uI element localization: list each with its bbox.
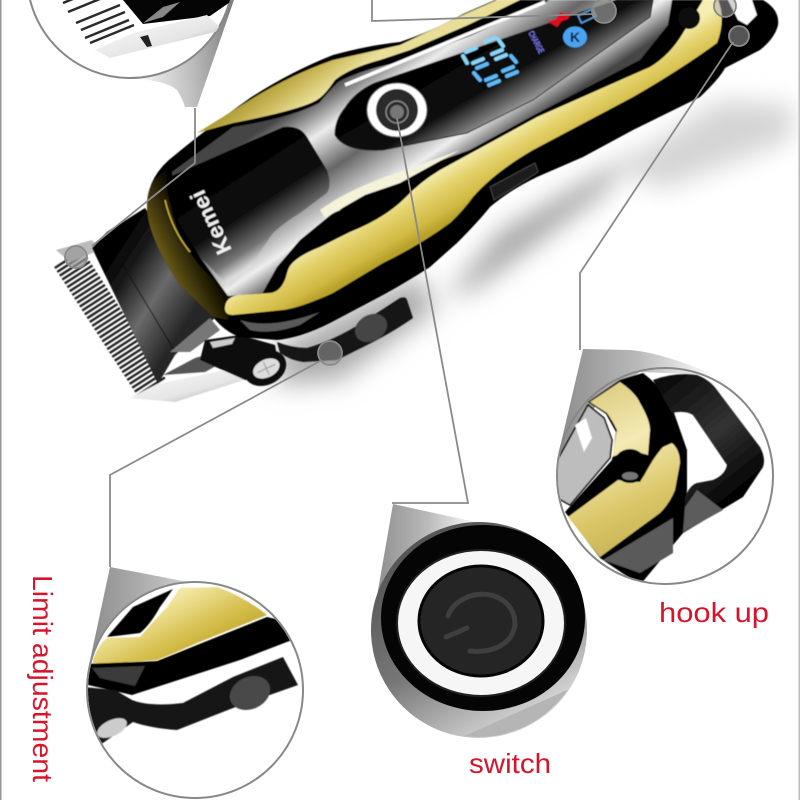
lever [84,657,298,745]
ring: hook [729,26,749,46]
power button [367,83,427,137]
chrome [552,405,612,505]
lens tail [557,349,715,460]
black wedge below deck [262,171,436,294]
chrome bar [95,15,223,58]
thumb pad [229,676,271,711]
label: Limit adjustment: Limit adjustment [27,575,58,782]
line to limit lens [110,360,322,567]
label: switch: switch [469,748,551,779]
ring: blade corner [65,246,87,268]
wheel [96,717,128,739]
top lens tail [120,0,234,107]
brand: Kemei [185,186,237,258]
hook opening [728,0,757,25]
lower gold band [225,0,722,315]
line to switch lens [392,118,468,503]
button face [419,566,543,676]
black corner [107,589,173,637]
lower bevel [465,690,568,737]
black underside [84,617,292,695]
teeth [63,0,134,43]
line to hook lens [580,42,733,350]
gold upper [590,382,650,457]
switch lens [371,504,590,745]
gold lower [568,443,680,557]
lens tail [372,504,480,625]
underside reflection [240,312,320,332]
black blade [123,0,233,24]
chrome stripes [345,2,545,85]
blade guards [130,318,280,402]
icon: logo circle [563,26,587,48]
head rim [147,170,230,320]
limit lever [277,297,413,362]
hook lens [552,349,773,585]
icon: power [446,594,515,651]
blade block [92,208,218,384]
grey plate [143,2,180,23]
hook arm [653,374,764,533]
line to top lens [92,108,195,246]
status label: CHARGE [526,29,546,55]
cast shadow under clipper [275,100,795,385]
gold body [93,587,267,665]
screw [613,449,647,483]
ring: limit lever [318,341,342,365]
top gold strip [197,0,520,133]
chrome deck [172,0,672,296]
line to display [372,0,595,21]
triangle [683,490,723,532]
ring: display icon [592,0,616,23]
top detail lens [27,0,233,78]
display panel [335,0,653,150]
black frame [565,373,687,585]
callout lines and target rings [65,0,749,567]
bottom grey [603,518,673,573]
body silhouette [147,0,778,340]
underside reflection [92,666,145,686]
icon: battery [578,9,596,23]
black bezel [381,525,585,711]
pale highlight band [320,150,460,218]
icon: logo circle: K [570,29,580,45]
clipper [56,0,778,402]
icon: red plug [547,12,572,27]
side button [490,163,538,200]
limit adjustment lens [84,567,303,798]
label: hook up: hook up [659,597,769,628]
lever thumb pad [350,308,392,348]
front black panel [167,127,330,287]
ring: hook screw [714,0,736,17]
chrome ring [397,550,565,696]
gold screw [678,7,700,29]
front panel accent [165,200,190,252]
adjustment wheel [238,343,292,393]
lens tail [88,567,230,670]
blade teeth [56,240,152,388]
LED digits [463,38,517,85]
